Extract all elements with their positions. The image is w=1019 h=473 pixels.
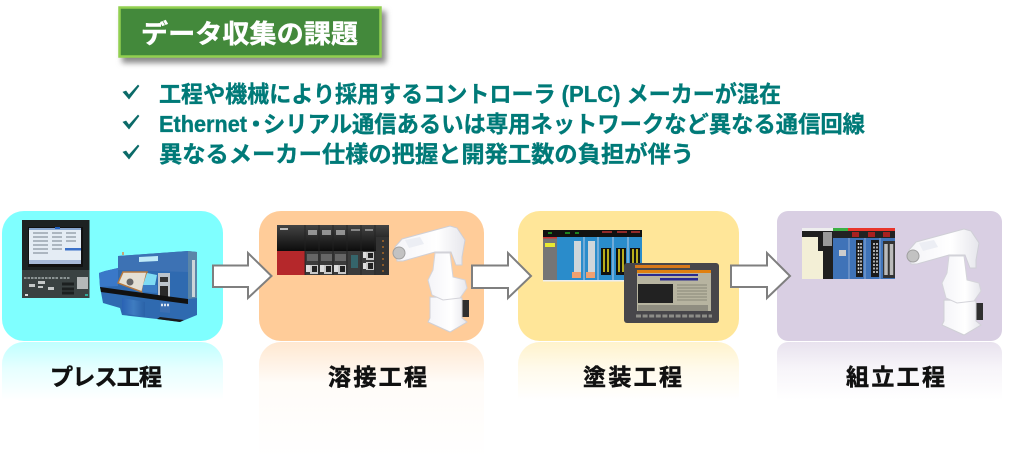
PLC rack: [277, 225, 389, 275]
panel background: [518, 211, 739, 341]
CNC controller: [22, 220, 90, 298]
bullet 2: Ethernet: [159, 111, 247, 137]
lathe machine: [99, 251, 197, 322]
label: プレス工程: プレス工程: [50, 364, 162, 390]
label: 溶接工程: 溶接工程: [328, 364, 427, 390]
panel: 組立工程: [777, 211, 1002, 400]
bullet 2: ・: [244, 111, 268, 137]
arrow: painting to assembly: [731, 253, 790, 298]
panel reflection: [518, 342, 739, 400]
panel background: [259, 211, 484, 341]
bullet 3: 異なるメーカー仕様の把握と開発工数の負担が伴う: [159, 141, 694, 167]
heading: データ収集の課題: [120, 8, 386, 63]
bullet 1: 工程や機械により採用するコントローラ (PLC) メーカーが混在: [159, 81, 781, 107]
panel reflection: [2, 342, 223, 400]
label: 組立工程: 組立工程: [846, 364, 945, 390]
label: 塗装工程: 塗装工程: [583, 364, 682, 390]
heading: データ収集の課題: データ収集の課題: [141, 19, 358, 49]
arrow: press to welding: [213, 253, 272, 298]
bullet 2: シリアル通信あるいは専用ネットワークなど異なる通信回線: [263, 111, 865, 137]
PLC rack: [802, 228, 895, 279]
panel: 溶接工程: [259, 211, 484, 458]
panel: 塗装工程: [518, 211, 739, 400]
panel reflection: [259, 342, 484, 458]
PLC rack: [543, 230, 642, 282]
panel background: [777, 211, 1002, 341]
arrow: welding to painting: [472, 253, 531, 298]
panel: プレス工程: [2, 211, 223, 400]
robot arm: [393, 226, 469, 332]
robot arm: [907, 229, 983, 335]
panel reflection: [777, 342, 1002, 400]
bullet list: challenges: [123, 81, 865, 167]
HMI touch panel: [624, 263, 719, 323]
panel background: [2, 211, 223, 341]
